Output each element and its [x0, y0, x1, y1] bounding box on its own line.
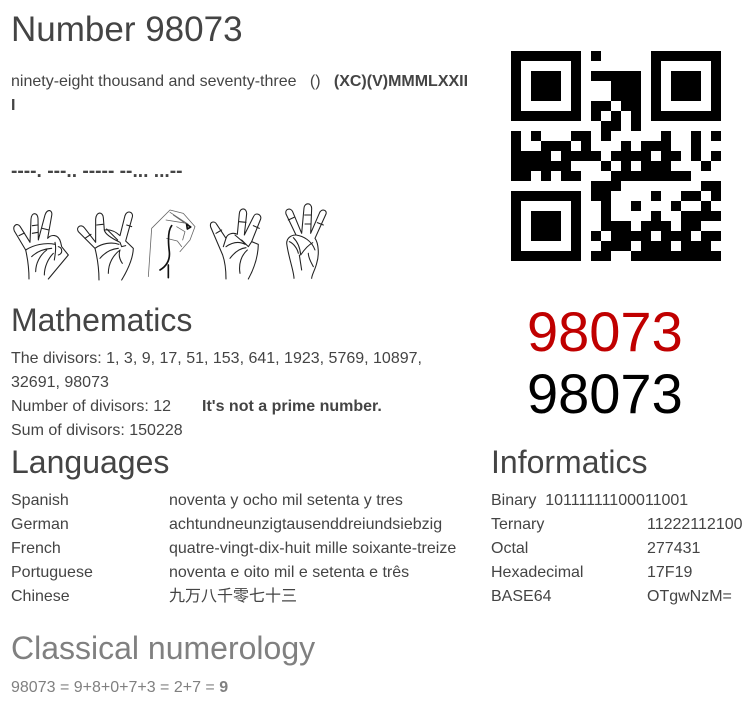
divisors text block: Number of divisors: 12 — [11, 398, 171, 415]
divisors text block: It's not a prime number. — [202, 398, 382, 415]
panel: number representations: BASE64 — [491, 588, 551, 605]
QR code — [511, 51, 721, 261]
icon: hand digit 4 — [286, 204, 326, 278]
title: Number 98073 — [11, 10, 243, 49]
heading: Informatics: Informatics — [491, 444, 647, 480]
sign language hands — [13, 203, 327, 280]
panel: language names: German — [11, 516, 69, 533]
finder pattern: top left — [511, 51, 581, 121]
number in black: 98073 — [527, 362, 683, 425]
panel: number representations: Octal — [491, 540, 528, 557]
finder pattern: bottom left — [511, 191, 581, 261]
panel: number representations — [491, 492, 743, 605]
morse code: ----. ---.. ----- --... ...-- — [11, 161, 183, 182]
number name and roman numeral: I — [11, 97, 15, 114]
panel: language names: 九万八千零七十三 — [169, 588, 297, 605]
heading: Languages: Languages — [11, 444, 169, 480]
divisors text block: Sum of divisors: 150228 — [11, 422, 183, 439]
panel: number representations: Hexadecimal — [491, 564, 583, 581]
data modules — [511, 51, 721, 261]
panel: language names: quatre-vingt-dix-huit mille soixante-treize — [169, 540, 456, 557]
divisors text block — [11, 350, 422, 439]
panel: language names: noventa y ocho mil setenta y tres — [169, 492, 403, 509]
finder pattern: top right — [651, 51, 721, 121]
panel: number representations: OTgwNzM= — [647, 588, 732, 605]
panel: number representations: 11222112100 — [647, 516, 743, 533]
panel: number representations: 277431 — [647, 540, 700, 557]
panel: number representations: Binary 10111111100011001 — [491, 492, 688, 509]
number name and roman numeral — [11, 73, 468, 114]
panel: language names: Portuguese — [11, 564, 93, 581]
icon: hand digit 8 — [78, 212, 133, 280]
icon: hand digit 9 — [14, 211, 68, 279]
panel: language names — [11, 492, 456, 605]
panel: language names: Chinese — [11, 588, 70, 605]
divisors text block: 32691, 98073 — [11, 374, 109, 391]
panel: language names: French — [11, 540, 61, 557]
panel: language names: Spanish — [11, 492, 69, 509]
panel: language names: noventa e oito mil e setenta e três — [169, 564, 409, 581]
panel: language names: achtundneunzigtausenddreiundsiebzig — [169, 516, 442, 533]
number name and roman numeral: ninety-eight thousand and seventy-three () (XC)(V)MMMLXXII — [11, 73, 468, 90]
panel: number representations: Ternary — [491, 516, 544, 533]
numerology calculation: 98073 = 9+8+0+7+3 = 2+7 = 9 — [11, 679, 228, 696]
number in red: 98073 — [527, 300, 683, 363]
heading: Mathematics: Mathematics — [11, 302, 192, 338]
icon: hand digit 0 — [148, 210, 195, 278]
divisors text block: The divisors: 1, 3, 9, 17, 51, 153, 641, 1923, 5769, 10897, — [11, 350, 422, 367]
heading: Classical numerology: Classical numerology — [11, 630, 315, 666]
panel: number representations: 17F19 — [647, 564, 692, 581]
icon: hand digit 7 — [210, 209, 261, 279]
